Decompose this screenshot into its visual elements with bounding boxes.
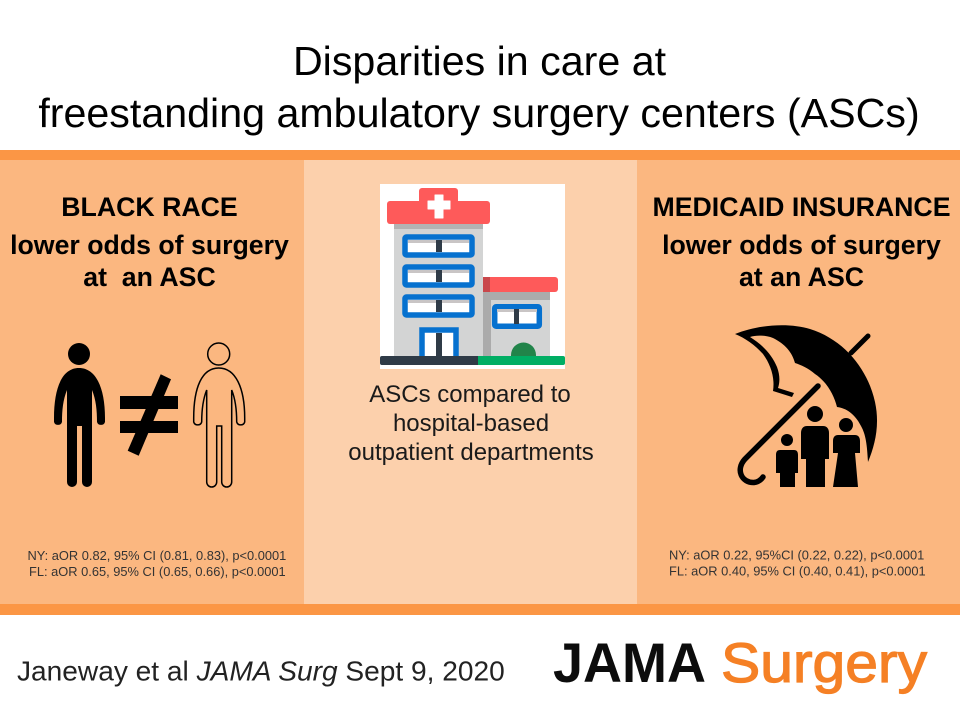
title: Disparities in care at (293, 38, 667, 84)
logo: JAMA Surgery: Surgery (721, 631, 927, 694)
title: freestanding ambulatory surgery centers (ASCs) (38, 90, 920, 136)
text: comparison description: hospital-based (393, 410, 549, 437)
logo: JAMA Surgery: JAMA (553, 631, 706, 694)
statistics: black race: NY: aOR 0.82, 95% CI (0.81, 0.83), p<0.0001 (28, 548, 286, 563)
heading: black race (10, 192, 289, 292)
icon: umbrella over family (735, 325, 877, 487)
title (38, 38, 920, 136)
text: comparison description (348, 381, 594, 466)
text: comparison description: outpatient departments (348, 439, 594, 466)
icon: hospital building (380, 184, 565, 369)
logo: JAMA Surgery (553, 631, 927, 694)
heading: medicaid insurance: MEDICAID INSURANCE (652, 192, 951, 222)
statistics: black race (28, 548, 286, 579)
panel: black race (0, 160, 304, 604)
statistics: medicaid insurance (669, 548, 926, 578)
panel: comparison (304, 160, 637, 604)
heading: medicaid insurance (652, 192, 951, 292)
statistics: medicaid insurance: FL: aOR 0.40, 95% CI (0.40, 0.41), p<0.0001 (669, 564, 926, 578)
panel: medicaid insurance (637, 160, 960, 604)
statistics: black race: FL: aOR 0.65, 95% CI (0.65, 0.66), p<0.0001 (29, 564, 286, 579)
heading: medicaid insurance: at an ASC (739, 262, 864, 292)
statistics: medicaid insurance: NY: aOR 0.22, 95%CI (0.22, 0.22), p<0.0001 (669, 548, 924, 562)
heading: black race: BLACK RACE (61, 192, 238, 222)
heading: medicaid insurance: lower odds of surgery (662, 230, 941, 260)
text: comparison description: ASCs compared to (369, 381, 571, 408)
heading: black race: lower odds of surgery (10, 230, 289, 260)
citation: Janeway et al JAMA Surg Sept 9, 2020 (17, 656, 505, 686)
icon: person not equal to person (54, 343, 245, 487)
heading: black race: at an ASC (83, 262, 216, 292)
